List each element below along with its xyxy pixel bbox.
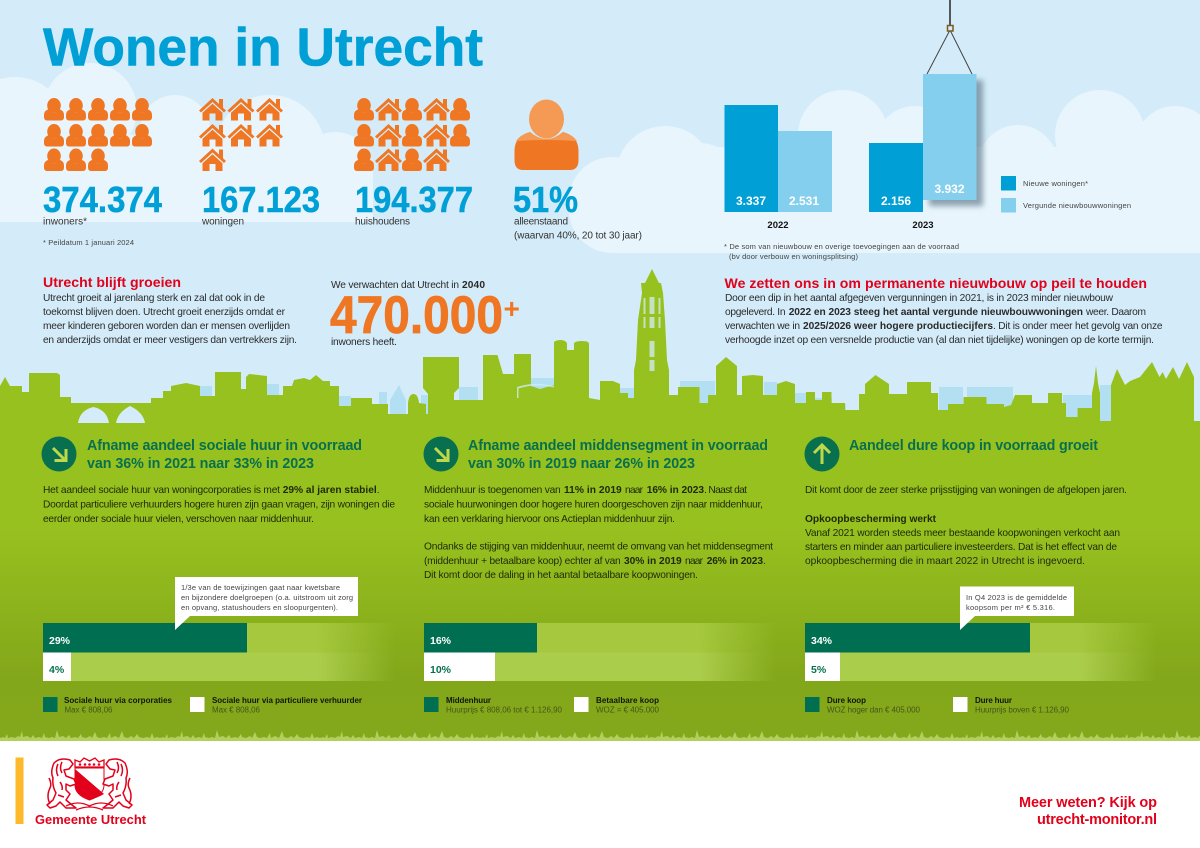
legend: sociale huur: Max € 808,06: [64, 706, 113, 714]
bar chart: woningen 2022-2023: 3.337: [736, 194, 766, 208]
bar chart: woningen 2022-2023: 3.932: [934, 182, 965, 196]
legend: middensegment: Huurprijs € 808,06 tot € 1.126,90: [446, 706, 563, 714]
callout: 470.000+: +: [504, 293, 520, 324]
text block: Utrecht blijft groeien: meer kinderen geboren worden dan er mensen overlijden: [43, 321, 290, 332]
body text: middenhuur: sociale huurwoningen door hogere huren doorgeschoven zijn naar middenhuur,: [424, 500, 763, 510]
text block: nieuwbouw op peil: weer. Daarom: [1085, 307, 1146, 318]
stat: alleenstaand: (waarvan 40%, 20 tot 30 jaar): [514, 230, 642, 242]
text block: nieuwbouw op peil: opgeleverd. In: [725, 307, 786, 318]
icon: left lion: [47, 759, 76, 808]
bar chart: sociale huur: 4%: [49, 664, 65, 676]
panel: dure koop: [804, 436, 1157, 714]
legend: middensegment: [424, 696, 660, 714]
body text: dure koop: [805, 485, 1127, 567]
footer background: [0, 741, 1200, 848]
stat: woningen: 167.123: [202, 179, 320, 220]
stat: alleenstaand: 51%: [513, 179, 578, 220]
callout: toewijzingen: 1/3e van de toewijzingen gaat naar kwetsbare: [181, 583, 340, 592]
callout: toewijzingen: en opvang, statushouders en sloopurgenten).: [181, 603, 338, 612]
text block: nieuwbouw op peil: verwachten we in: [725, 321, 800, 332]
legend: middensegment: WOZ = € 405.000: [596, 706, 660, 714]
body text: dure koop: Dit komt door de zeer sterke prijsstijging van woningen de afgelopen jaren.: [805, 485, 1127, 496]
heading: sociale huur: van 36% in 2021 naar 33% in 2023: [87, 456, 314, 472]
legend: dure koop: WOZ hoger dan € 405.000: [827, 706, 921, 714]
bar chart: woningen 2022-2023: 2.156: [881, 194, 911, 208]
text block: Utrecht blijft groeien: toekomst blijven doen. Utrecht groeit enerzijds omdat er: [43, 307, 286, 318]
body text: middenhuur: Dit komt door de daling in het aantal betaalbare koopwoningen.: [424, 570, 698, 581]
footer link text: utrecht-monitor.nl: [1037, 812, 1157, 828]
body text: middenhuur: . Naast dat: [704, 485, 747, 496]
logo wordmark: Gemeente Utrecht: [35, 812, 147, 827]
footer link text: Meer weten? Kijk op: [1019, 795, 1157, 811]
icon: logo scroll: [66, 803, 113, 810]
icon: arrow up: [804, 436, 840, 472]
body text: dure koop: Opkoopbescherming werkt: [805, 514, 937, 525]
icon: alleenstaand person: [514, 100, 578, 170]
skyline and green field: [0, 269, 1200, 742]
yellow accent bar: [16, 758, 24, 824]
cloud right: [569, 90, 1200, 253]
logo: Gemeente Utrecht: [35, 758, 147, 827]
bar chart: dure koop: [805, 623, 1157, 681]
chart legend: Nieuwe woningen*: [1023, 179, 1088, 188]
legend: dure koop: Huurprijs boven € 1.126,90: [975, 706, 1070, 714]
grass fringe: [0, 725, 1200, 742]
text block: nieuwbouw op peil: Door een dip in het aantal afgegeven vergunningen in 2021, is in 2023 minder nieuwbouw: [725, 293, 1114, 304]
callout: 470.000+: 2040: [462, 280, 485, 291]
bar chart: middensegment: 10%: [430, 664, 452, 676]
legend: middensegment: Middenhuur: [446, 696, 491, 705]
body text: middenhuur: 26% in 2023: [707, 556, 763, 567]
icons: huishoudens: [354, 98, 470, 171]
heading: middensegment: Afname aandeel middensegment in voorraad: [468, 438, 768, 454]
heading: sociale huur: Afname aandeel sociale huur in voorraad: [87, 438, 362, 454]
bar chart: woningen 2022-2023: 2022: [767, 220, 789, 231]
legend: sociale huur: Sociale huur via corporaties: [64, 696, 173, 705]
body text: sociale huur: Het aandeel sociale huur van woningcorporaties is met: [43, 485, 280, 496]
text block: nieuwbouw op peil: verhoogde inzet op een versnelde productie van (al dan niet tijdelijke) woningen op de korte termijn.: [725, 335, 1154, 346]
bar chart: woningen 2022-2023: [724, 0, 983, 231]
body text: middenhuur: (middenhuur + betaalbare koop) echter af van: [424, 556, 621, 567]
stat: inwoners: 374.374: [43, 179, 162, 220]
body text: middenhuur: naar: [625, 485, 644, 496]
legend: middensegment: Betaalbare koop: [596, 696, 659, 705]
icon: shield: [75, 768, 104, 800]
callout: 470.000+: inwoners heeft.: [331, 337, 397, 348]
callout: toewijzingen: en bijzondere doelgroepen (o.a. uitstroom uit zorg: [181, 593, 353, 602]
legend: sociale huur: Sociale huur via particuliere verhuurder: [212, 696, 362, 705]
body text: middenhuur: .: [763, 556, 766, 567]
Dom tower windows: [517, 297, 660, 398]
legend: dure koop: Dure huur: [975, 696, 1012, 705]
chart legend: Vergunde nieuwbouwwoningen: [1023, 201, 1131, 210]
chart footnote: [724, 242, 959, 261]
icon: right lion: [103, 759, 132, 808]
stat: alleenstaand: alleenstaand: [514, 216, 568, 228]
body text: dure koop: Vanaf 2021 worden steeds meer bestaande koopwoningen verkocht aan: [805, 528, 1120, 539]
legend: dure koop: Dure koop: [827, 696, 866, 705]
icons: woningen: [199, 98, 283, 171]
skyline background: [200, 378, 1111, 422]
text block: nieuwbouw op peil: 2022 en 2023 steeg het aantal vergunde nieuwbouwwoningen: [789, 307, 1083, 318]
body text: sociale huur: eerder onder sociale huur vielen, verschoven naar middenhuur.: [43, 514, 314, 525]
icon: arrow down right: [42, 436, 76, 472]
heading: sociale huur: [87, 438, 362, 472]
legend: sociale huur: [43, 696, 362, 714]
legend: sociale huur: Max € 808,06: [212, 706, 261, 714]
body text: middenhuur: 16% in 2023: [647, 485, 704, 496]
stat: huishoudens: huishoudens: [355, 216, 410, 228]
legend: dure koop: [805, 696, 1070, 714]
text block: nieuwbouw op peil: We zetten ons in om permanente nieuwbouw op peil te houden: [724, 275, 1147, 291]
body text: dure koop: opkoopbescherming die in maart 2022 in Utrecht is ingevoerd.: [805, 556, 1085, 567]
bar chart: dure koop: 34%: [811, 635, 833, 647]
text block: Utrecht blijft groeien: en anderzijds omdat er meer vestigers dan vertrekkers zijn.: [43, 335, 297, 346]
text block: Utrecht blijft groeien: Utrecht groeit al jarenlang sterk en zal dat ook in de: [43, 293, 265, 304]
bar chart: woningen 2022-2023: 2023: [912, 220, 934, 231]
icon: crown: [75, 758, 104, 767]
callout: 470.000+: We verwachten dat Utrecht in: [331, 280, 459, 291]
text block: nieuwbouw op peil: . Dit is onder meer het gevolg van onze: [993, 321, 1163, 332]
callout: koopsom: [960, 586, 1074, 630]
text block: Utrecht blijft groeien: Utrecht blijft groeien: [43, 274, 181, 290]
bar chart: middensegment: 16%: [430, 635, 452, 647]
heading: middensegment: [468, 438, 768, 472]
callout: koopsom: In Q4 2023 is de gemiddelde: [966, 593, 1067, 602]
panel: middensegment: [424, 436, 776, 714]
text block: nieuwbouw op peil: 2025/2026 weer hogere productiecijfers: [803, 321, 993, 332]
title: Wonen in Utrecht: [43, 18, 483, 78]
stat: woningen: woningen: [201, 216, 244, 228]
bar chart: sociale huur: [43, 623, 395, 681]
body text: middenhuur: 30% in 2019: [624, 556, 682, 567]
chart footnote: (bv door verbouw en woningsplitsing): [729, 252, 858, 261]
chart legend: [1001, 176, 1131, 212]
body text: middenhuur: naar: [685, 556, 704, 567]
stat: inwoners: * Peildatum 1 januari 2024: [43, 238, 134, 247]
callout: koopsom: koopsom per m² € 5.316.: [966, 603, 1055, 612]
body text: middenhuur: Ondanks de stijging van middenhuur, neemt de omvang van het middensegment: [424, 542, 773, 552]
chart footnote: * De som van nieuwbouw en overige toevoegingen aan de voorraad: [724, 242, 959, 251]
body text: middenhuur: [424, 485, 773, 581]
body text: sociale huur: 29% al jaren stabiel: [283, 485, 377, 496]
footer link text: [1019, 795, 1157, 828]
text block: Utrecht blijft groeien: [43, 274, 297, 346]
bar chart: dure koop: 5%: [811, 664, 827, 676]
icon: crane hook: [927, 0, 972, 74]
panel: sociale huur: [42, 436, 395, 714]
body text: middenhuur: kan een verklaring hiervoor ons Actieplan middenhuur zijn.: [424, 514, 675, 525]
heading: dure koop: Aandeel dure koop in voorraad groeit: [849, 438, 1098, 454]
stat: huishoudens: 194.377: [355, 179, 473, 220]
body text: middenhuur: Middenhuur is toegenomen van: [424, 485, 561, 496]
bar chart: woningen 2022-2023: 2.531: [789, 194, 819, 208]
cloud left: [0, 63, 373, 222]
icons: inwoners: [44, 98, 152, 171]
bar chart: middensegment: [424, 623, 776, 681]
heading: middensegment: van 30% in 2019 naar 26% in 2023: [468, 456, 695, 472]
bar chart: sociale huur: 29%: [49, 635, 71, 647]
stat: alleenstaand: [513, 179, 642, 242]
body text: middenhuur: 11% in 2019: [564, 485, 622, 496]
text block: nieuwbouw op peil: [724, 275, 1163, 346]
stat: inwoners: [43, 179, 162, 247]
bridge arches: [78, 406, 145, 423]
body text: sociale huur: [43, 485, 395, 525]
callout: toewijzingen: [175, 577, 358, 630]
icon: arrow down right: [424, 436, 458, 472]
body text: sociale huur: Doordat particuliere verhuurders hogere huren zijn gaan vragen, zijn woningen die: [43, 500, 395, 510]
body text: dure koop: starters en minder aan particuliere investeerders. Dat is het effect van de: [805, 542, 1117, 553]
body text: sociale huur: .: [377, 485, 380, 496]
callout: 470.000+: 470.000: [330, 286, 503, 345]
stat: inwoners: inwoners*: [43, 216, 87, 228]
